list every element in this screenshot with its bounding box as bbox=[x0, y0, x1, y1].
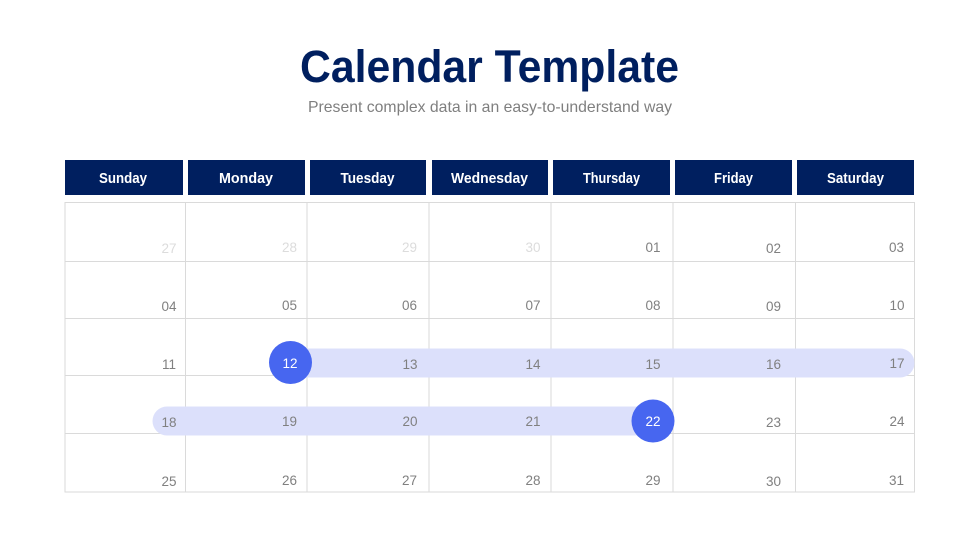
week 3 dates: 13 bbox=[402, 357, 418, 372]
header: Tuesday: Tuesday bbox=[340, 171, 394, 187]
week 5 dates: 25 bbox=[161, 474, 177, 489]
header: Wednesday bbox=[432, 160, 548, 195]
week 2 dates: 07 bbox=[525, 298, 541, 313]
week 5 dates bbox=[161, 473, 904, 489]
week 5 dates: 29 bbox=[645, 473, 661, 488]
week 4 dates: 22 bbox=[645, 414, 661, 429]
week 1 dates: 29 bbox=[402, 240, 417, 255]
week 1 dates: 01 bbox=[645, 240, 661, 255]
week 4 dates: 23 bbox=[766, 415, 781, 430]
header: Friday bbox=[675, 160, 792, 195]
week 1 dates: 27 bbox=[161, 241, 177, 256]
week 2 dates: 04 bbox=[161, 299, 177, 314]
week 1 dates bbox=[161, 240, 904, 256]
marker: start date 12 bbox=[269, 341, 312, 384]
week 3 dates: 16 bbox=[766, 357, 781, 372]
week 5 dates: 30 bbox=[766, 474, 781, 489]
header: Thursday: Thursday bbox=[583, 171, 640, 187]
header: Saturday bbox=[797, 160, 914, 195]
week 5 dates: 27 bbox=[402, 473, 417, 488]
weekday header row bbox=[65, 160, 914, 195]
week 1 dates: 02 bbox=[766, 241, 781, 256]
week 3 dates: 14 bbox=[525, 357, 541, 372]
week 4 dates bbox=[161, 414, 905, 430]
week 3 dates: 15 bbox=[645, 357, 661, 372]
week 1 dates: 28 bbox=[282, 240, 297, 255]
week 3 dates: 12 bbox=[282, 356, 298, 371]
subtitle: Present complex data in an easy-to-understand way bbox=[308, 99, 672, 116]
week 3 dates: 17 bbox=[889, 356, 905, 371]
header: Sunday bbox=[65, 160, 183, 195]
week 3 dates: 11 bbox=[162, 357, 176, 372]
title: Calendar Template bbox=[300, 41, 679, 92]
week 5 dates: 28 bbox=[525, 473, 541, 488]
header: Monday: Monday bbox=[219, 171, 273, 187]
week 4 dates: 24 bbox=[889, 414, 905, 429]
week 1 dates: 30 bbox=[525, 240, 541, 255]
header: Wednesday: Wednesday bbox=[451, 171, 528, 187]
week 4 dates: 18 bbox=[161, 415, 177, 430]
header: Tuesday bbox=[310, 160, 426, 195]
week 4 dates: 19 bbox=[282, 414, 297, 429]
week 2 dates: 08 bbox=[645, 298, 661, 313]
header: Thursday bbox=[553, 160, 670, 195]
week 4 dates: 20 bbox=[402, 414, 418, 429]
header: Monday bbox=[188, 160, 305, 195]
week 2 dates: 10 bbox=[889, 298, 905, 313]
week 2 dates: 05 bbox=[282, 298, 297, 313]
week 5 dates: 31 bbox=[889, 473, 904, 488]
week 5 dates: 26 bbox=[282, 473, 297, 488]
week 2 dates bbox=[161, 298, 905, 314]
header: Saturday: Saturday bbox=[827, 171, 884, 187]
calendar grid bbox=[65, 202, 914, 492]
week 2 dates: 09 bbox=[766, 299, 781, 314]
header: Friday: Friday bbox=[714, 171, 753, 187]
header: Sunday: Sunday bbox=[99, 171, 147, 187]
marker: end date 22 bbox=[632, 400, 674, 442]
highlight bar: 12 to 17 bbox=[295, 348, 914, 378]
week 4 dates: 21 bbox=[525, 414, 541, 429]
week 3 dates bbox=[162, 356, 905, 372]
week 2 dates: 06 bbox=[402, 298, 417, 313]
highlight bar: 18 to 22 bbox=[152, 406, 650, 436]
week 1 dates: 03 bbox=[889, 240, 904, 255]
